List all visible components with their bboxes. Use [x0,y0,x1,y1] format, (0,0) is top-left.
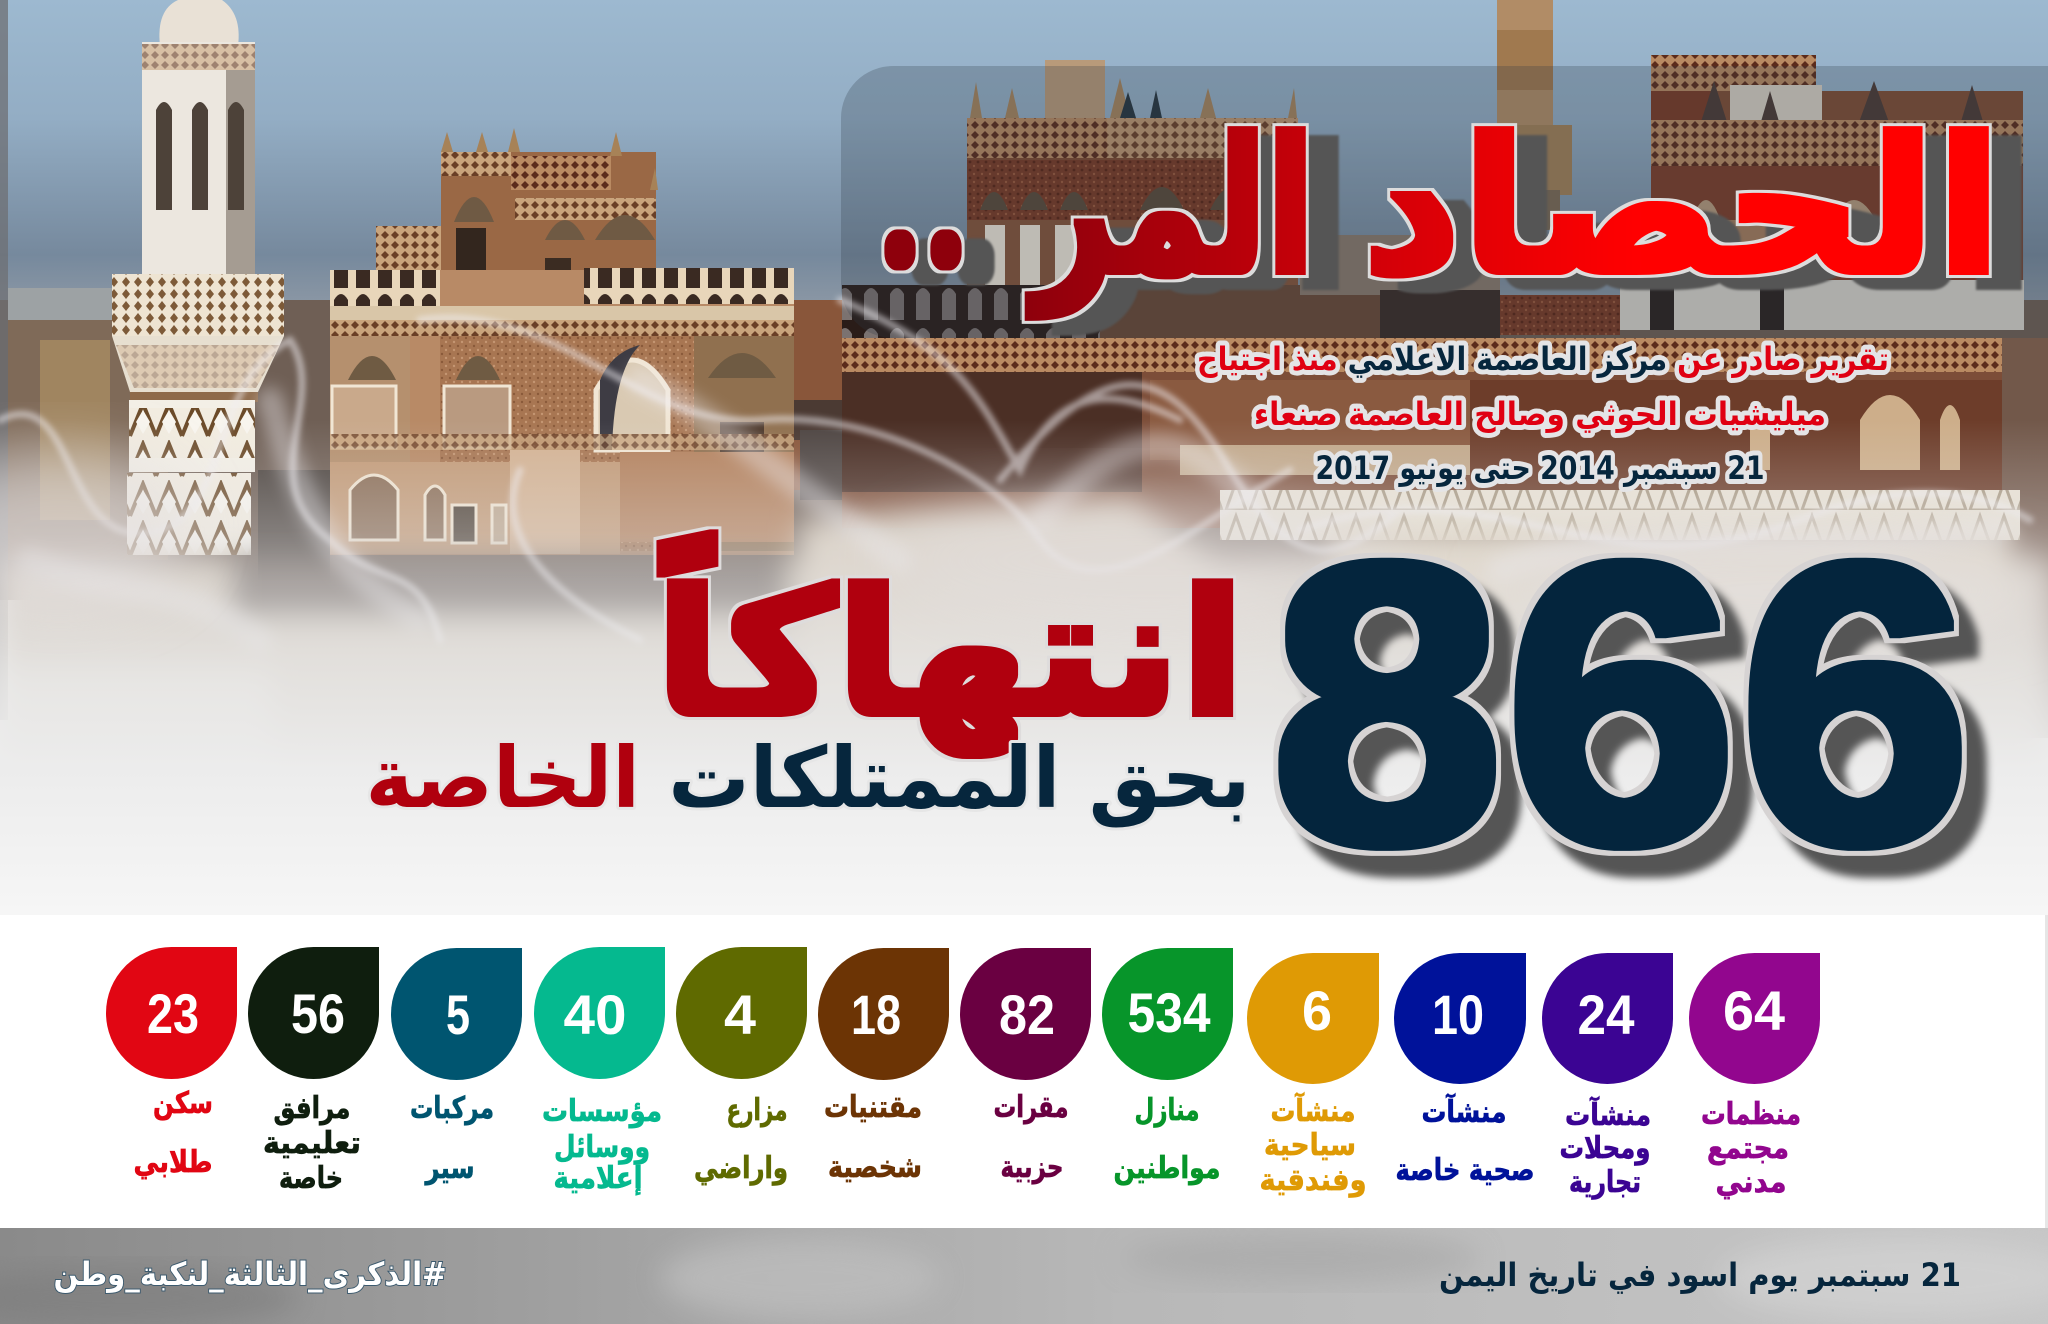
subheading: بحق الممتلكات الخاصة [366,729,1250,828]
stat: 5 مركبات سير [391,948,522,1186]
stat: 40 مؤسسات ووسائل إعلامية: 40 [564,983,626,1046]
stat: 40 مؤسسات ووسائل إعلامية: مؤسسات [542,1094,662,1129]
footer bar [0,1228,2048,1324]
stat: 534 منازل مواطنين [1102,948,1233,1186]
shadows around central building [258,470,330,580]
stat: 4 مزارع واراضي [676,947,807,1186]
stat: 24 منشآت ومحلات تجارية: 24 [1578,983,1634,1046]
smoke wisps [0,300,2030,640]
stat: 6 منشآت سياحية وفندقية: منشآت [1270,1092,1356,1129]
stat: 40 مؤسسات ووسائل إعلامية: ووسائل [554,1130,650,1165]
white statistics band [0,915,2048,1228]
stat: 24 منشآت ومحلات تجارية: ومحلات [1560,1131,1650,1166]
stat: 10 منشآت صحية خاصة: 10 [1432,983,1484,1046]
big number 866: 866 [1270,480,1972,927]
dark title panel [841,66,2048,338]
stat: 64 منظمات مجتمع مدني: منظمات [1701,1097,1801,1132]
stat: 24 منشآت ومحلات تجارية: منشآت [1565,1096,1651,1133]
white fade [0,420,2048,768]
stat: 24 منشآت ومحلات تجارية [1542,953,1673,1200]
minaret left [112,0,284,555]
title: الحصاد المر [877,98,2002,318]
distant city left [0,0,168,720]
stat: 40 مؤسسات ووسائل إعلامية [534,947,665,1196]
stat: 56 مرافق تعليمية خاصة: خاصة [279,1161,343,1196]
light lower field [0,767,2048,915]
stat: 64 منظمات مجتمع مدني [1689,953,1820,1200]
stat: 534 منازل مواطنين: مواطنين [1114,1151,1220,1186]
stat: 4 مزارع واراضي: واراضي [694,1151,788,1186]
stat: 18 مقتنيات شخصية [818,948,949,1185]
stat: 534 منازل مواطنين: 534 [1128,981,1210,1044]
stat: 5 مركبات سير: سير [424,1151,474,1186]
subtitle line 1: تقرير صادر عن مركز العاصمة الاعلامي منذ اجتياح [1197,340,1889,378]
stat: 5 مركبات سير: مركبات [410,1091,494,1126]
stat: 82 مقرات حزبية [960,948,1091,1185]
subtitle [1197,340,1889,487]
stat: 23 سكن طلابي [106,947,237,1180]
stat: 64 منظمات مجتمع مدني: مدني [1716,1165,1786,1200]
stat: 82 مقرات حزبية: حزبية [1000,1150,1064,1185]
stat: 10 منشآت صحية خاصة: منشآت [1422,1093,1506,1130]
stat: 56 مرافق تعليمية خاصة: مرافق [274,1091,350,1126]
stat: 40 مؤسسات ووسائل إعلامية: إعلامية [554,1161,642,1196]
stat: 23 سكن طلابي: سكن [153,1086,213,1121]
lower rooftops [0,500,2048,770]
central tan building [330,128,842,555]
stat: 534 منازل مواطنين: منازل [1134,1093,1200,1128]
stat: 18 مقتنيات شخصية: شخصية [828,1150,922,1185]
stat: 56 مرافق تعليمية خاصة: 56 [291,982,345,1045]
stat: 5 مركبات سير: 5 [446,983,470,1046]
title dots: •• [877,194,969,311]
stat: 10 منشآت صحية خاصة [1394,953,1534,1188]
stat: 6 منشآت سياحية وفندقية: 6 [1302,979,1332,1042]
title word 2: المر [1028,98,1314,318]
subtitle line 2: ميليشيات الحوثي وصالح العاصمة صنعاء [1254,395,1826,433]
stat: 23 سكن طلابي: 23 [147,982,199,1045]
background photo: Sana'a skyline [0,0,2048,915]
stat: 18 مقتنيات شخصية: مقتنيات [824,1090,922,1125]
stat: 10 منشآت صحية خاصة: صحية خاصة [1396,1153,1534,1188]
right skyline buildings [842,0,2048,738]
stat: 6 منشآت سياحية وفندقية: سياحية [1264,1128,1356,1163]
stat: 4 مزارع واراضي: مزارع [726,1093,788,1128]
title word 1: الحصاد [1362,98,2002,317]
stat: 56 مرافق تعليمية خاصة [248,947,379,1196]
stat: 64 منظمات مجتمع مدني: مجتمع [1707,1131,1789,1166]
stat: 23 سكن طلابي: طلابي [134,1145,212,1180]
stat: 4 مزارع واراضي: 4 [724,983,756,1046]
stat: 18 مقتنيات شخصية: 18 [851,983,901,1046]
stat: 6 منشآت سياحية وفندقية [1247,953,1379,1198]
footer hashtag: #الذكرى_الثالثة_لنكبة_وطن [54,1255,446,1293]
stat: 82 مقرات حزبية: مقرات [994,1090,1068,1125]
heading: انتهاكاً: انتهاكاً [655,533,1245,755]
footer tagline: 21 سبتمبر يوم اسود في تاريخ اليمن [1439,1256,1961,1294]
stat: 24 منشآت ومحلات تجارية: تجارية [1569,1165,1641,1200]
subtitle line 3: 21 سبتمبر 2014 حتى يونيو 2017 [1316,449,1765,487]
stat: 82 مقرات حزبية: 82 [999,983,1055,1046]
base of city [0,300,2048,600]
sky [0,0,2048,340]
stat: 6 منشآت سياحية وفندقية: وفندقية [1260,1163,1366,1198]
stat: 56 مرافق تعليمية خاصة: تعليمية [263,1126,361,1161]
stat: 64 منظمات مجتمع مدني: 64 [1723,979,1785,1042]
